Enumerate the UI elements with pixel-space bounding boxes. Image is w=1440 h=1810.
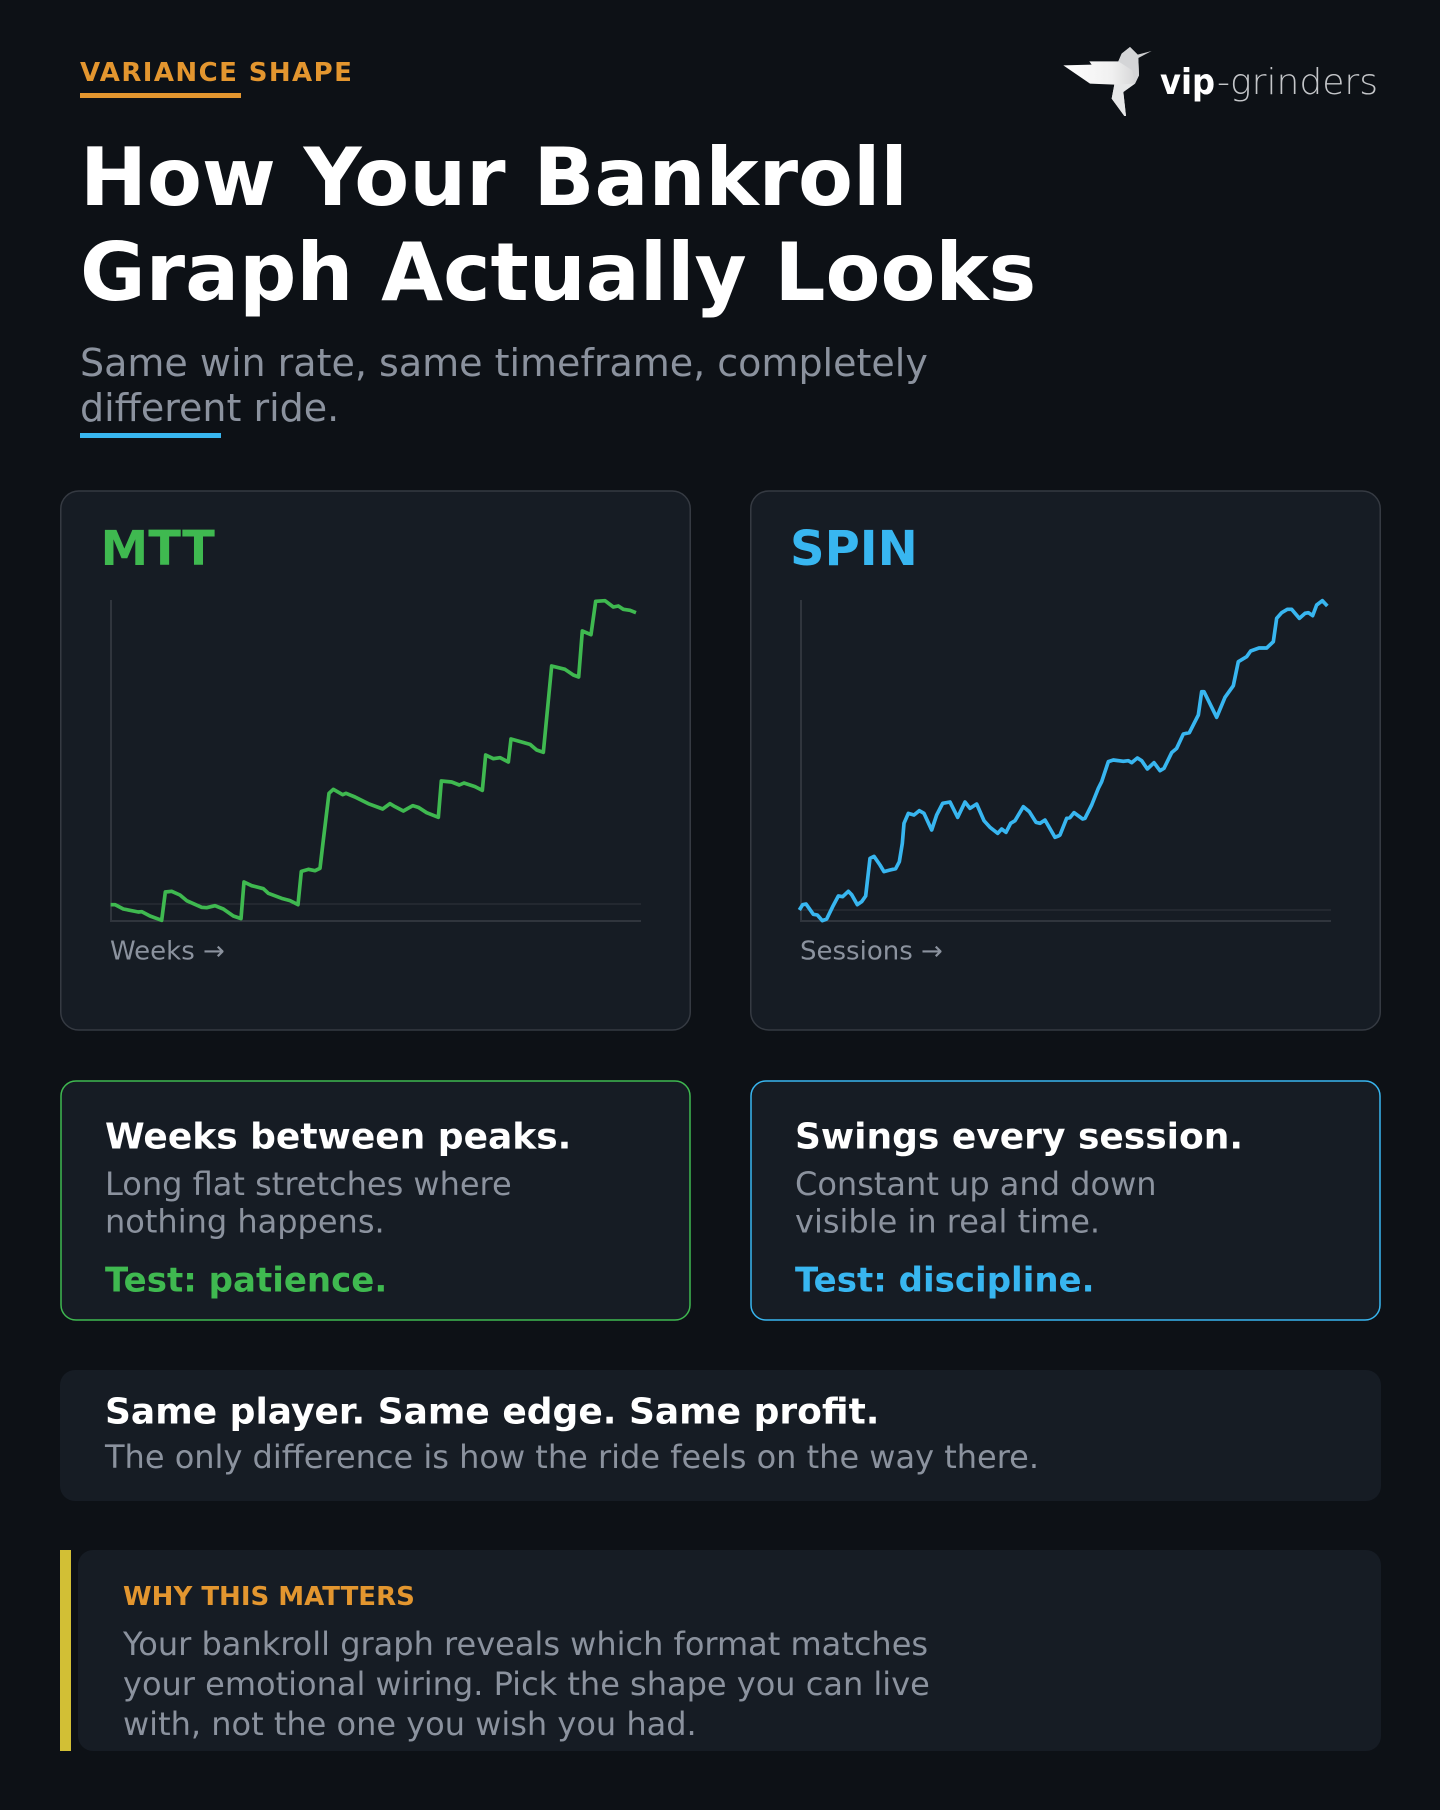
axis label: sessions: Sessions → xyxy=(800,936,943,966)
logo: vip-grinders xyxy=(1063,47,1378,116)
panel: why this matters: WHY THIS MATTERS xyxy=(123,1582,415,1612)
panel: same player summary: Same player. Same edge. Same profit. xyxy=(105,1392,879,1432)
panel: why this matters: your emotional wiring. Pick the shape you can live xyxy=(123,1665,930,1703)
heading: SPIN: SPIN xyxy=(790,521,918,577)
callout: MTT weeks between peaks: Long flat stretches where xyxy=(105,1165,512,1203)
callout: MTT weeks between peaks: Weeks between peaks. xyxy=(105,1116,571,1158)
title: Graph Actually Looks xyxy=(80,226,1036,319)
logo: vip-grinders: vip xyxy=(1160,62,1215,103)
accent bar xyxy=(60,1550,71,1751)
panel: why this matters xyxy=(60,1550,1381,1751)
eyebrow: variance shape: VARIANCE SHAPE xyxy=(80,58,353,88)
title xyxy=(80,131,1036,319)
callout: MTT weeks between peaks: nothing happens. xyxy=(105,1202,385,1240)
heading: MTT: MTT xyxy=(100,521,215,577)
subtitle: different ride. xyxy=(80,386,339,430)
callout: MTT weeks between peaks: Test: patience. xyxy=(105,1260,387,1300)
subtitle xyxy=(80,341,928,438)
callout: SPIN swings every session: Constant up and down xyxy=(795,1165,1157,1203)
axis label: weeks: Weeks → xyxy=(110,936,225,966)
panel: why this matters: Your bankroll graph reveals which format matches xyxy=(122,1625,928,1663)
panel: same player summary: The only difference is how the ride feels on the way there. xyxy=(104,1438,1039,1476)
callout: MTT weeks between peaks xyxy=(61,1081,690,1320)
line chart: MTT bankroll xyxy=(110,600,641,921)
line chart: SPIN bankroll xyxy=(799,600,1331,921)
panel: SPIN chart xyxy=(751,491,1380,1030)
subtitle: Same win rate, same timeframe, completely xyxy=(80,341,928,385)
callout: SPIN swings every session: Test: discipline. xyxy=(795,1260,1095,1300)
callout: SPIN swings every session: Swings every session. xyxy=(795,1116,1243,1158)
logo: vip-grinders: -grinders xyxy=(1217,62,1378,103)
panel: MTT chart xyxy=(61,491,690,1030)
callout: SPIN swings every session xyxy=(751,1081,1380,1320)
title: How Your Bankroll xyxy=(80,131,908,224)
panel: same player summary xyxy=(60,1370,1381,1501)
callout: SPIN swings every session: visible in real time. xyxy=(795,1202,1100,1240)
panel: why this matters: with, not the one you wish you had. xyxy=(123,1705,697,1743)
